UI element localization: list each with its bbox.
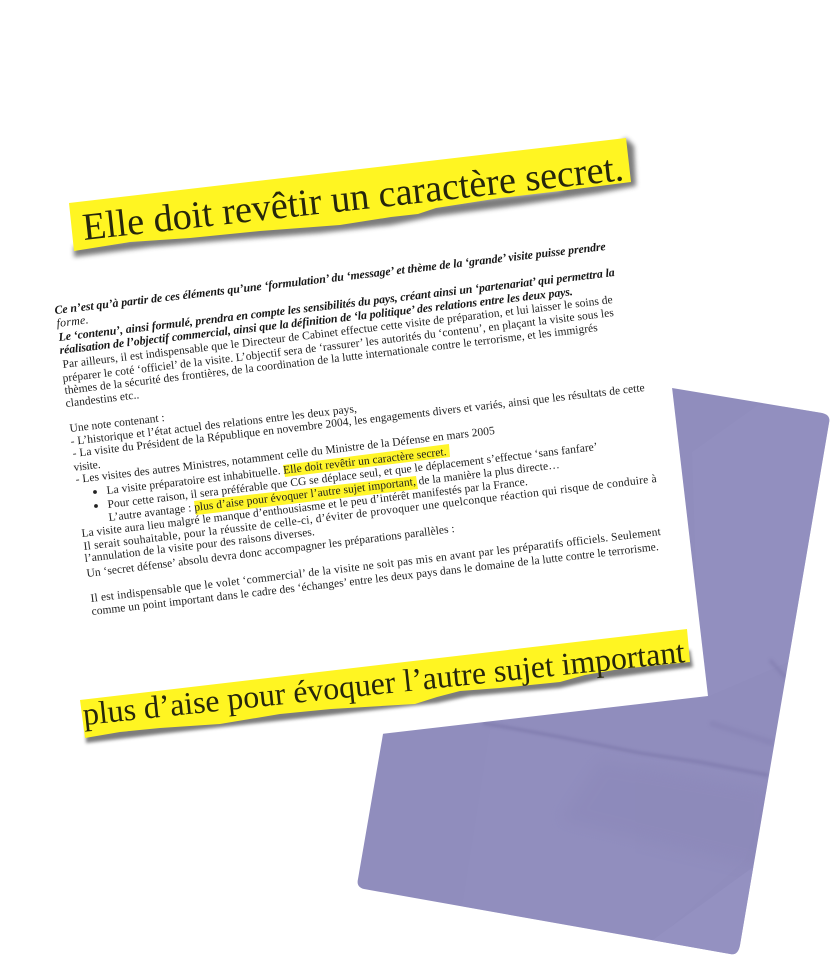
text block: document body: Pour cette raison, il sera préférable que CG se déplace seul, et que le déplacement s’effectue ‘sans fanfare’	[107, 441, 598, 511]
highlight: Elle doit revêtir un caractère secret	[283, 444, 450, 477]
panel: purple crumpled paper	[358, 388, 830, 956]
text block: document body: - La visite du Président de la République en novembre 2004, les engagements divers et variés, ainsi que les résultats de cette	[72, 382, 645, 460]
text block: document body: Ce n’est qu’à partir de ces éléments qu’une ‘formulation’ du ‘message’ et thème de la ‘grande’ visite puisse prendre	[54, 239, 606, 317]
text block: document body: - Les visites des autres Ministres, notamment celle du Ministre de la Défense en mars 2005	[75, 425, 496, 486]
text block: document body: La visite aura lieu malgré le manque d’enthousiasme et le peu d’intérêt manifestés par la France.	[81, 476, 528, 540]
text block: document body: Par ailleurs, il est indispensable que le Directeur de Cabinet effectue cette visite de préparation, et lui laisser le soins de	[62, 294, 613, 371]
text block: document body: Un ‘secret défense’ absolu devra donc accompagner les préparations parallèles :	[86, 523, 455, 580]
text block: document body: Le ‘contenu’, ainsi formulé, prendra en compte les sensibilités du pays, créant ainsi un ‘partenariat’ qui permettra la	[57, 265, 615, 344]
text block: document body: thèmes de la sécurité des frontières, de la coordination de la lutte internationale contre le terrorisme, et les immigrés	[64, 322, 599, 397]
infographic canvas	[55, 136, 830, 954]
text block: document body	[54, 239, 662, 618]
text block: document body: - L’historique et l’état actuel des relations entre les deux pays,	[70, 403, 358, 448]
text block: document body: La visite préparatoire est inhabituelle. Elle doit revêtir un caractère secret.	[106, 446, 447, 497]
callout: bottom yellow torn strip: plus d’aise pour évoquer l’autre sujet important	[81, 634, 687, 732]
highlight: plus d'aise pour évoquer l'autre sujet important	[194, 476, 418, 515]
text block: document body: Il est indispensable que le volet ‘commercial’ de la visite ne soit pas mis en avant par les préparatifs officiels. Seulement	[90, 526, 662, 605]
text block: document body: l’annulation de la visite pour des raisons diverses.	[84, 526, 316, 565]
text block: document body: préparer le coté ‘officiel’ de la visite. L’objectif sera de ‘rassurer’ les autorités du ‘contenu’, en plaçant la visite sous les	[62, 307, 615, 385]
callout: top yellow torn strip: Elle doit revêtir un caractère secret.	[80, 147, 626, 249]
text block: document body: L’autre avantage : plus d’aise pour évoquer l’autre sujet important, de la manière la plus directe…	[108, 459, 560, 524]
text block: document body: Une note contenant :	[69, 412, 165, 435]
text block: document body: forme.	[56, 312, 89, 330]
text block: document body: réalisation de l’objectif commercial, ainsi que la définition de ‘la politique’ des relations entre les deux pays.	[59, 284, 573, 357]
text block: document body: Il serait souhaitable, pour la réussite de celle-ci, d’éviter de provoquer une quelconque réaction qui risque de conduire à	[83, 473, 657, 553]
panel: white typed document	[20, 190, 708, 769]
text block: document body: clandestins etc..	[65, 389, 140, 410]
text block: document body: visite.	[73, 459, 101, 474]
text block: document body: comme un point important dans le cadre des ‘échanges’ entre les deux pays dans le domaine de la lutte contre le terrorisme.	[91, 541, 659, 618]
